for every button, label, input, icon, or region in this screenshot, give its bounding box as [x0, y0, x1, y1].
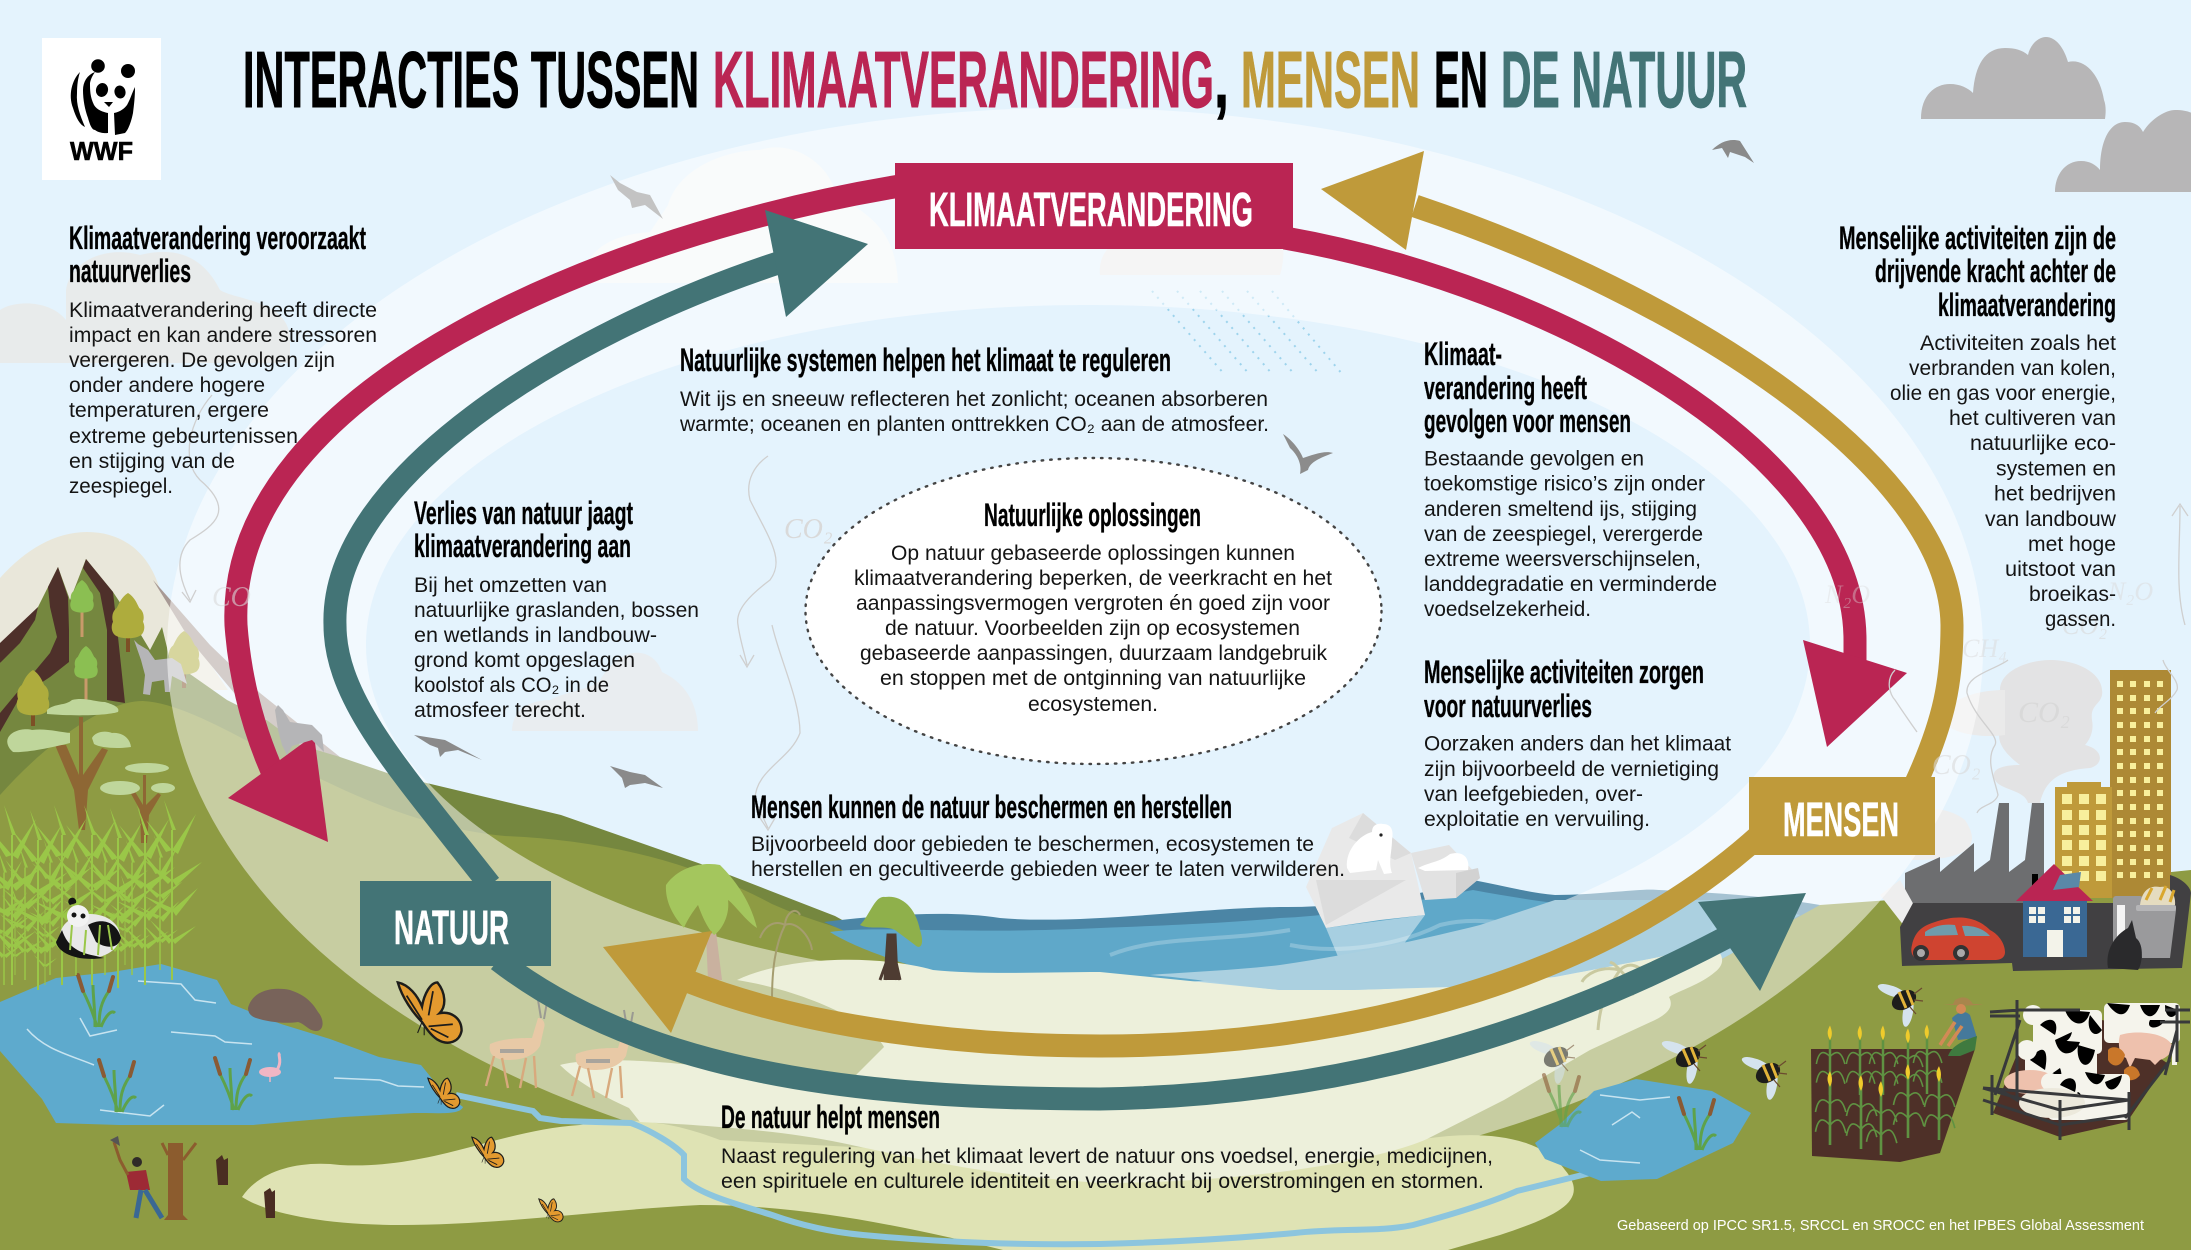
body text: broeikas-	[2029, 583, 2116, 606]
body text: Bijvoorbeeld door gebieden te beschermen, ecosystemen te	[751, 833, 1314, 856]
panda in bamboo	[56, 898, 121, 959]
cattails in left pond	[78, 975, 252, 1112]
body text: uitstoot van	[2005, 558, 2116, 581]
dotted ellipse: natuurlijke oplossingen	[806, 458, 1382, 764]
title: DE NATUUR	[1501, 35, 1747, 124]
faded palm on beach	[1582, 962, 1645, 1030]
heading: Klimaatverandering veroorzaakt	[69, 220, 366, 256]
gas labels: N₂O	[1824, 580, 1870, 609]
body text: atmosfeer terecht.	[414, 699, 586, 722]
land: right side	[1000, 870, 2191, 1250]
gas labels: CO₂	[2018, 696, 2070, 729]
body text: grond komt opgeslagen	[414, 649, 635, 672]
wolf howling	[134, 640, 187, 695]
birds	[414, 140, 1754, 788]
body text: Klimaatverandering heeft directe	[69, 299, 377, 322]
trash cans and bag	[2107, 886, 2176, 970]
gas labels: CH₄	[1962, 634, 2007, 663]
heading: natuurverlies	[69, 253, 191, 289]
body text: Oorzaken anders dan het klimaat	[1424, 732, 1731, 756]
iceberg	[1306, 813, 1480, 990]
title: ,	[1214, 35, 1229, 124]
land: mid green hill	[0, 701, 1100, 1250]
label box: natuur: NATUUR	[394, 902, 509, 955]
mountain snow background	[0, 532, 228, 690]
body text: klimaatverandering beperken, de veerkracht en het	[854, 567, 1332, 590]
lumberjack and tree	[110, 1136, 196, 1220]
text: klimaatverandering heeft gevolgen	[1424, 336, 1717, 621]
gas labels: CO₂	[784, 514, 833, 545]
source note: Gebaseerd op IPCC SR1.5, SRCCL en SROCC en het IPBES Global Assessment	[1617, 1217, 2145, 1234]
heading	[69, 220, 366, 289]
forest trees	[17, 580, 200, 726]
label box: klimaatverandering: KLIMAATVERANDERING	[929, 184, 1253, 237]
corn field	[1811, 1025, 1975, 1162]
climate gas trails	[180, 395, 2188, 830]
body text	[414, 574, 699, 722]
arrow: natuur to klimaat	[335, 210, 868, 885]
body text: Bij het omzetten van	[414, 574, 607, 597]
text: verlies van natuur	[414, 495, 699, 722]
body text: verergeren. De gevolgen zijn	[69, 349, 335, 372]
body text: ecosystemen.	[1028, 693, 1158, 716]
body text: van leefgebieden, over-	[1424, 783, 1643, 806]
title	[243, 35, 1747, 124]
body text: onder andere hogere	[69, 374, 265, 397]
text: de natuur helpt mensen	[721, 1099, 1493, 1193]
mangrove tree	[860, 897, 922, 980]
cliff wedge	[153, 580, 340, 757]
WWF logo	[42, 38, 161, 180]
body text: extreme weersverschijnselen,	[1424, 548, 1701, 571]
dry palm	[760, 911, 812, 1000]
wolf on slope	[275, 705, 324, 755]
gas labels: N₂O	[2107, 577, 2153, 606]
body text: aanpassingsvermogen vergroten én goed zijn voor	[856, 592, 1330, 615]
heading: Menselijke activiteiten zorgen	[1424, 654, 1704, 690]
title: INTERACTIES TUSSEN	[243, 35, 699, 124]
sea	[824, 880, 1820, 992]
gas labels	[212, 514, 2153, 781]
sand beach	[560, 943, 1722, 1183]
text: natuurlijke systemen	[679, 342, 1269, 436]
mountain ridges	[0, 559, 125, 732]
body text: exploitatie en vervuiling.	[1424, 808, 1650, 831]
arrow: klimaat to natuur	[228, 186, 900, 842]
text: menselijke activiteiten zorgen voor natuurverlies	[1424, 654, 1731, 831]
body text: het bedrijven	[1994, 482, 2116, 506]
heading	[1839, 220, 2116, 323]
text: mensen kunnen de natuur beschermen	[751, 789, 1345, 881]
gazelles	[486, 1000, 633, 1098]
label box: natuur	[360, 881, 551, 966]
animal pen	[1983, 1000, 2190, 1140]
right pond	[1535, 1079, 1751, 1181]
body text: warmte; oceanen en planten onttrekken CO₂ aan de atmosfeer.	[679, 413, 1269, 436]
bamboo grove	[0, 800, 202, 990]
sea light foreground band	[1150, 900, 1720, 990]
pig back	[2119, 1032, 2172, 1068]
title: KLIMAATVERANDERING	[713, 35, 1214, 124]
body text: van landbouw	[1985, 508, 2117, 531]
house with solar panel	[2016, 864, 2093, 957]
heading: Natuurlijke systemen helpen het klimaat te reguleren	[680, 342, 1171, 378]
arrow: natuur to mensen	[498, 893, 1806, 1099]
body text: Bestaande gevolgen en	[1424, 448, 1644, 470]
body text: voedselzekerheid.	[1424, 598, 1591, 621]
body text: het cultiveren van	[1949, 407, 2116, 430]
bee right	[1740, 1054, 1787, 1101]
body text: natuurlijke graslanden, bossen	[414, 599, 699, 622]
heading: klimaatverandering aan	[414, 528, 631, 564]
heading: Verlies van natuur jaagt	[414, 495, 633, 531]
left pond	[0, 964, 463, 1125]
body text: Op natuur gebaseerde oplossingen kunnen	[891, 542, 1295, 565]
body text: temperaturen, ergere	[69, 399, 269, 422]
body text	[1424, 732, 1731, 831]
hippo	[248, 989, 323, 1031]
pig front	[2004, 1070, 2056, 1094]
sheep	[2019, 1088, 2085, 1118]
rain under cloud	[1152, 291, 1343, 375]
body text: gebaseerde aanpassingen, duurzaam landgebruik	[860, 642, 1327, 665]
body text: Naast regulering van het klimaat levert de natuur ons voedsel, energie, medicijnen,	[721, 1145, 1493, 1168]
body text: verbranden van kolen,	[1909, 357, 2116, 380]
text: menselijke activiteiten drijvende kracht	[1839, 220, 2117, 631]
body text	[751, 833, 1345, 881]
butterflies	[398, 982, 563, 1222]
body text: impact en kan andere stressoren	[69, 324, 377, 347]
label box: mensen: MENSEN	[1783, 794, 1899, 847]
cattails in right pond	[1544, 1075, 1716, 1150]
cow middle	[2017, 1040, 2097, 1088]
WWF wordmark: WWF	[70, 136, 133, 166]
heading: gevolgen voor mensen	[1424, 403, 1631, 439]
body text: gassen.	[2045, 608, 2116, 631]
label box: mensen	[1749, 777, 1935, 855]
cow front	[2041, 1072, 2130, 1120]
ripples in right pond	[1580, 1095, 1670, 1163]
heading: Klimaat-	[1424, 336, 1502, 372]
body text: een spirituele en culturele identiteit en veerkracht bij overstromingen en stormen.	[721, 1170, 1484, 1193]
body text: landdegradatie en verminderde	[1424, 573, 1717, 596]
body text: en stoppen met de ontginning van natuurlijke	[880, 667, 1306, 690]
tree stumps	[216, 1155, 275, 1218]
faded bee on sand	[1528, 1038, 1575, 1085]
acacia trees	[7, 699, 175, 843]
bee above farmer	[1876, 981, 1923, 1028]
heading	[1424, 654, 1704, 724]
heading	[1424, 336, 1631, 439]
title: EN	[1434, 35, 1488, 124]
gas labels: CO₂	[2062, 611, 2107, 640]
body text: systemen en	[1996, 458, 2116, 480]
cow back right	[2104, 1003, 2180, 1065]
factory	[1905, 803, 2044, 903]
body text: koolstof als CO₂ in de	[414, 674, 609, 697]
bee near pond	[1660, 1038, 1707, 1085]
body text: Wit ijs en sneeuw reflecteren het zonlicht; oceanen absorberen	[680, 388, 1268, 411]
panda mark	[71, 59, 135, 135]
heading: Natuurlijke oplossingen	[984, 497, 1201, 533]
body text: en wetlands in landbouw-	[414, 624, 657, 647]
body text: toekomstige risico’s zijn onder	[1424, 472, 1705, 496]
palm tree	[666, 864, 757, 980]
body text: zeespiegel.	[69, 475, 173, 498]
body text: extreme gebeurtenissen	[69, 425, 298, 448]
arrow: mensen to natuur	[603, 835, 1760, 1046]
body text: herstellen en gecultiveerde gebieden weer te laten verwilderen.	[751, 858, 1345, 881]
river	[456, 1095, 1615, 1244]
arrow: klimaat to mensen	[1285, 238, 1907, 747]
label box: klimaatverandering	[895, 163, 1293, 249]
body text: met hoge	[2028, 533, 2116, 556]
heading: voor natuurverlies	[1424, 688, 1592, 724]
body text	[69, 299, 377, 498]
polar bears	[1347, 824, 1468, 874]
body text: natuurlijke eco-	[1970, 432, 2116, 455]
dark city ground	[1900, 875, 2191, 971]
car	[1911, 917, 2005, 961]
arrows of the cycle	[228, 151, 1952, 1099]
body text: zijn bijvoorbeeld de vernietiging	[1424, 758, 1719, 781]
cloud: top right small	[2055, 110, 2191, 192]
heading: verandering heeft	[1424, 370, 1587, 406]
ring overlay: lighter band around the cycle	[167, 108, 1983, 1192]
gas labels: CO	[212, 582, 251, 613]
pale field	[242, 1121, 1574, 1250]
body text: Activiteiten zoals het	[1920, 332, 2116, 355]
text: klimaatverandering veroorzaakt natuurverlies	[69, 220, 377, 498]
body text: olie en gas voor energie,	[1890, 382, 2116, 405]
faint background clouds	[0, 147, 1972, 860]
gas labels: CO₂	[1932, 750, 1981, 781]
title: MENSEN	[1241, 35, 1420, 124]
body text	[854, 542, 1332, 716]
heading	[414, 495, 633, 564]
smoke	[1880, 660, 2102, 940]
body text	[1424, 448, 1717, 621]
chickens	[2108, 1047, 2140, 1080]
heading: De natuur helpt mensen	[721, 1099, 940, 1135]
ripples in left pond	[27, 981, 424, 1116]
body text: en stijging van de	[69, 450, 235, 473]
cloud: top right large	[1921, 37, 2106, 119]
body text	[1890, 332, 2117, 631]
cow back left	[2023, 1005, 2102, 1054]
fence	[1983, 1000, 2190, 1140]
arrow: mensen to klimaat	[1321, 151, 1952, 785]
city buildings	[2055, 670, 2171, 898]
body text	[721, 1145, 1493, 1193]
body text: de natuur. Voorbeelden zijn op ecosystemen	[885, 617, 1300, 640]
body text	[679, 388, 1269, 436]
farmer	[1940, 997, 1983, 1056]
heading: Mensen kunnen de natuur beschermen en herstellen	[751, 789, 1232, 825]
body text: anderen smeltend ijs, stijging	[1424, 498, 1697, 521]
body text: van de zeespiegel, verergerde	[1424, 523, 1703, 546]
land: dark green back hill	[0, 559, 1100, 1250]
flamingo	[259, 1053, 281, 1082]
